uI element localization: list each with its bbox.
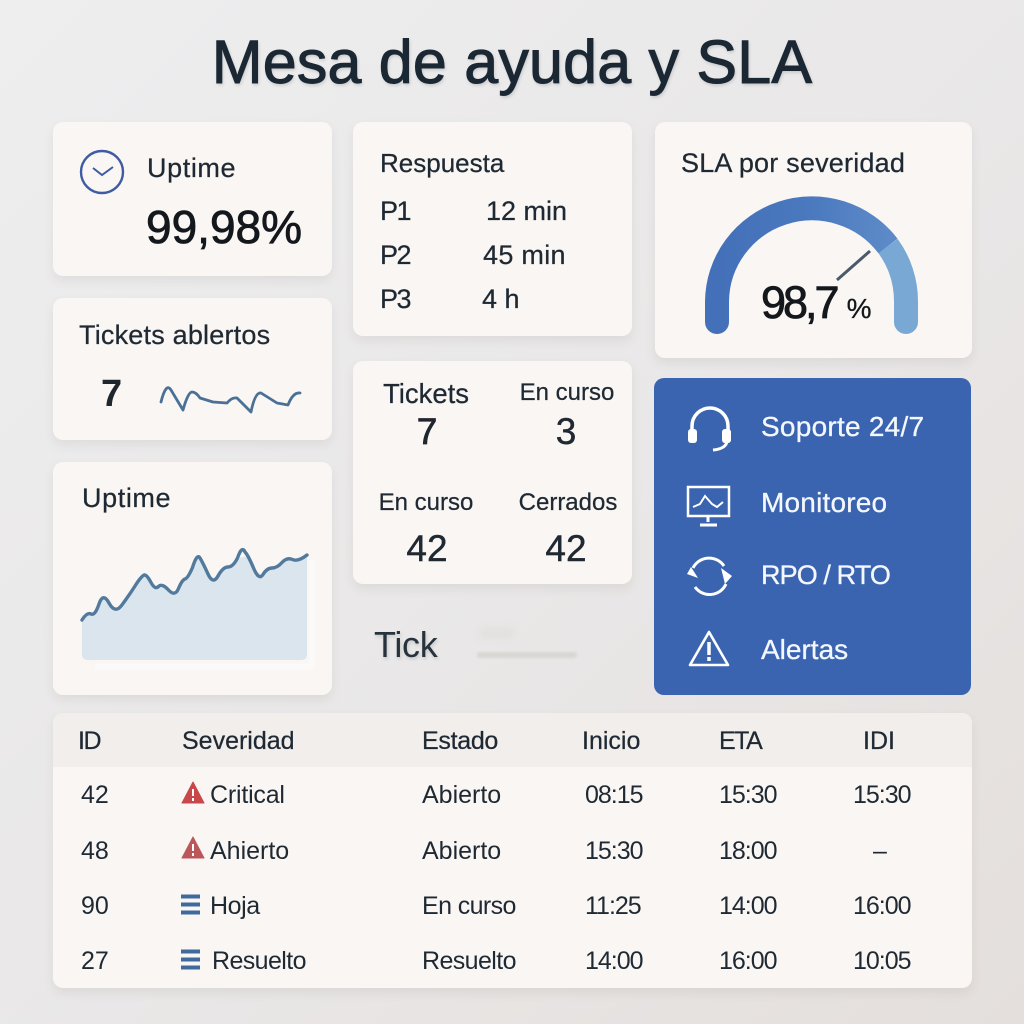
icon: red warning [182, 836, 204, 858]
table row 42: 42 [81, 781, 109, 809]
panel: ticket counts [353, 361, 632, 584]
table row 42: 15:30 [853, 781, 911, 809]
count: in progress second: En curso [379, 489, 473, 516]
table row 42: 08:15 [585, 781, 643, 809]
table row 48: – [873, 837, 887, 865]
panel: uptime metric [53, 122, 332, 276]
table header: Inicio [582, 727, 640, 755]
count: tickets: Tickets [383, 378, 469, 409]
support label: Soporte 24/7 [761, 411, 924, 442]
table row 90: 11:25 [585, 892, 641, 920]
table row 48: Ahierto [210, 837, 289, 865]
table row 90: 90 [81, 892, 109, 920]
table row 48: Abierto [422, 837, 501, 865]
table header: IDI [863, 727, 895, 755]
table row 48 [81, 836, 887, 865]
icon: clock [80, 150, 124, 194]
response row P3: 4 h [482, 284, 520, 314]
uptime label: Uptime [147, 153, 236, 183]
table row 27: 10:05 [853, 947, 911, 975]
table row 90 [81, 892, 911, 920]
response row P3 [380, 284, 520, 314]
count: closed: Cerrados [519, 489, 617, 516]
count: closed: 42 [545, 528, 587, 569]
table row 42: Critical [210, 781, 285, 809]
response row P2: 45 min [483, 240, 566, 270]
monitoring label: Monitoreo [761, 487, 887, 518]
count: in progress: 3 [556, 411, 576, 452]
open tickets label: Tickets ablertos [79, 320, 270, 350]
gauge heading: SLA por severidad [681, 148, 905, 178]
table row 48: 18:00 [719, 837, 777, 865]
sparkline [160, 386, 302, 414]
alerts label: Alertas [761, 634, 848, 665]
table row 27: 14:00 [585, 947, 643, 975]
panel: uptime chart [53, 462, 332, 695]
response heading: Respuesta [380, 148, 504, 178]
table row 90: 14:00 [719, 892, 777, 920]
response row P1: 12 min [486, 196, 567, 226]
table header [53, 713, 972, 767]
panel: ticket table [53, 713, 972, 988]
table row 27 [81, 947, 911, 975]
table row 42 [81, 781, 911, 809]
response row P1: P1 [380, 196, 410, 226]
response row P2 [380, 240, 566, 270]
response row P1 [380, 196, 567, 226]
table row 42: Abierto [422, 781, 501, 809]
rpo rto label: RPO / RTO [761, 560, 890, 590]
count: tickets: 7 [417, 410, 437, 452]
panel: services [654, 378, 971, 695]
area chart [80, 548, 309, 660]
table header: ETA [719, 727, 761, 755]
icon: menu lines [181, 894, 200, 914]
icon: monitor [686, 486, 730, 526]
response row P2: P2 [380, 240, 410, 270]
table row 48: 15:30 [585, 837, 643, 865]
open tickets value: 7 [101, 373, 122, 415]
count: in progress second [379, 489, 473, 569]
table header: ID [78, 727, 100, 755]
table row 48: 48 [81, 837, 109, 865]
table header: Severidad [182, 727, 295, 755]
uptime chart label: Uptime [82, 483, 171, 513]
table row 27: 16:00 [719, 947, 777, 975]
table row 27: 27 [81, 947, 109, 975]
panel: response times [353, 122, 632, 336]
count: closed [519, 489, 617, 569]
icon: red warning [182, 782, 204, 804]
table row 27: Resuelto [212, 947, 306, 975]
icon: menu lines [181, 950, 200, 970]
count: in progress second: 42 [406, 528, 448, 569]
table header: Estado [422, 727, 498, 755]
count: tickets [383, 378, 469, 452]
gauge value: 98,7 % [761, 277, 872, 328]
faded tick label: Tick [374, 624, 437, 665]
title: Mesa de ayuda y SLA [212, 28, 812, 96]
table row 42: 15:30 [719, 781, 777, 809]
gauge [705, 196, 918, 334]
uptime value: 99,98% [146, 201, 302, 253]
icon: warning [688, 630, 730, 666]
table row 90: Hoja [210, 892, 260, 920]
count: in progress [520, 379, 614, 452]
panel: SLA gauge [655, 122, 972, 358]
icon: refresh [687, 556, 732, 596]
table row 27: Resuelto [422, 947, 516, 975]
count: in progress: En curso [520, 379, 614, 406]
response row P3: P3 [380, 284, 410, 314]
table row 90: 16:00 [853, 892, 911, 920]
panel: open tickets [53, 298, 332, 440]
icon: headset [688, 406, 731, 452]
table row 90: En curso [422, 892, 516, 920]
